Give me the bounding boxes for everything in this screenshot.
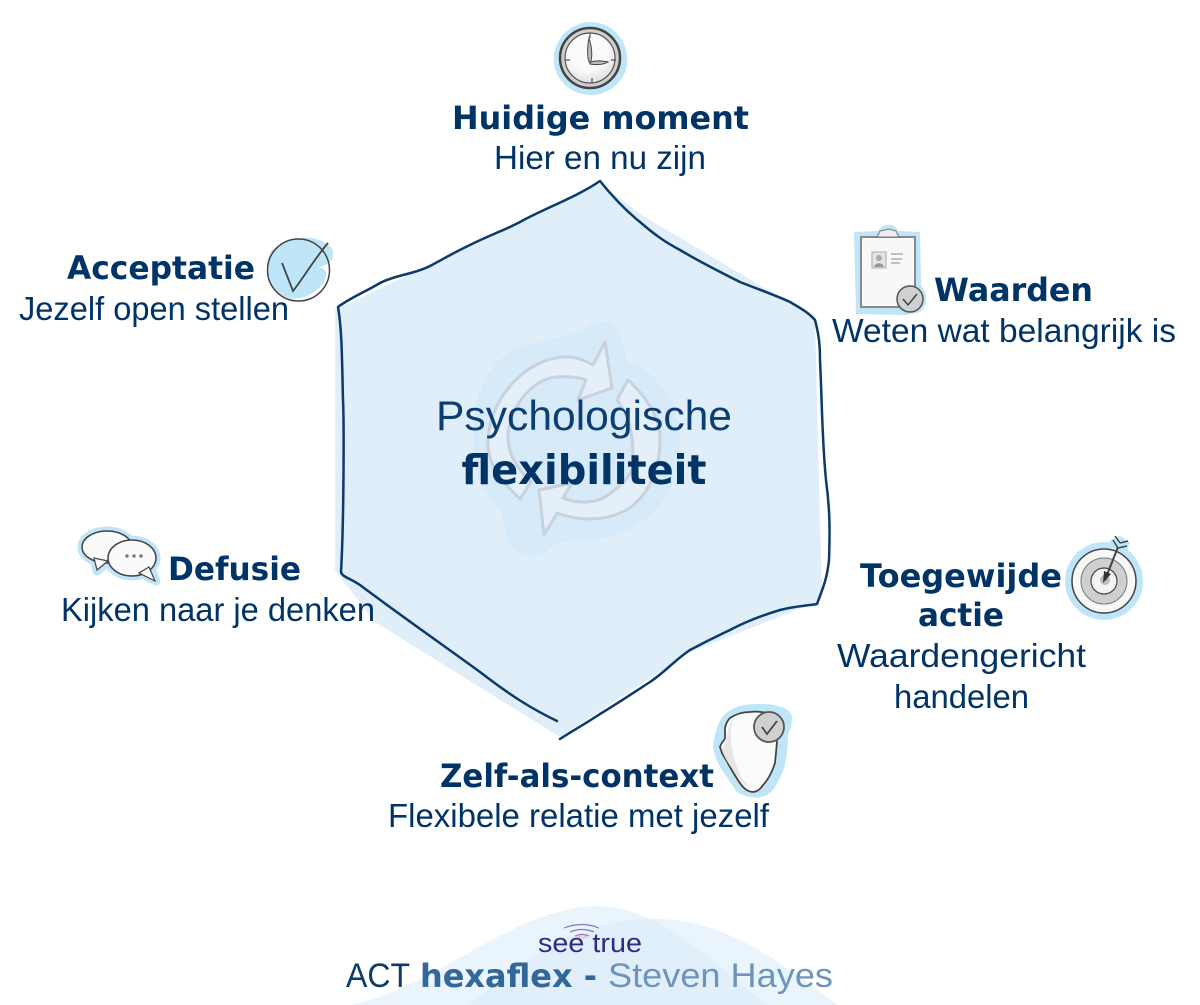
icon: head [713, 704, 792, 798]
footer title [346, 957, 833, 995]
icon: check circle [267, 238, 333, 301]
heading: Acceptatie [19, 249, 289, 327]
icon: clipboard [854, 225, 926, 315]
icon: target [1065, 536, 1143, 620]
icon: cycle arrows [473, 322, 680, 556]
footer title: ACT [346, 957, 410, 995]
heading: Defusie: Kijken naar je denken [61, 591, 375, 628]
heading: Waarden: Waarden [934, 271, 1093, 309]
heading: Defusie [61, 550, 375, 628]
heading: Toegewijde actie: Toegewijde [860, 557, 1062, 595]
heading: Waarden [832, 271, 1176, 349]
footer title: Steven Hayes [608, 957, 833, 995]
center title: flexibiliteit [462, 446, 706, 494]
heading: Zelf-als-context [388, 757, 770, 834]
center title [436, 392, 732, 494]
panel: hexagon [335, 181, 830, 739]
heading: Acceptatie: Jezelf open stellen [19, 290, 289, 327]
icon: clock [554, 22, 627, 95]
heading: Toegewijde actie [837, 557, 1086, 715]
logo: see true: see true [538, 928, 642, 958]
heading: Zelf-als-context: Flexibele relatie met jezelf [388, 797, 770, 834]
heading: Zelf-als-context: Zelf-als-context [440, 757, 714, 795]
heading: Huidige moment: Hier en nu zijn [494, 139, 706, 176]
heading: Defusie: Defusie [168, 550, 301, 588]
heading: Huidige moment [452, 99, 749, 176]
heading: Huidige moment: Huidige moment [452, 99, 749, 137]
heading: Acceptatie: Acceptatie [67, 249, 255, 287]
heading: Toegewijde actie: actie [918, 596, 1004, 634]
center title: Psychologische [436, 392, 732, 439]
footer background hills [352, 906, 838, 1005]
footer title: hexaflex - [420, 957, 597, 995]
heading: Waarden: Weten wat belangrijk is [832, 312, 1176, 349]
icon: speech bubbles [82, 531, 156, 581]
heading: Toegewijde actie: Waardengericht [837, 637, 1086, 674]
heading: Toegewijde actie: handelen [894, 678, 1029, 715]
